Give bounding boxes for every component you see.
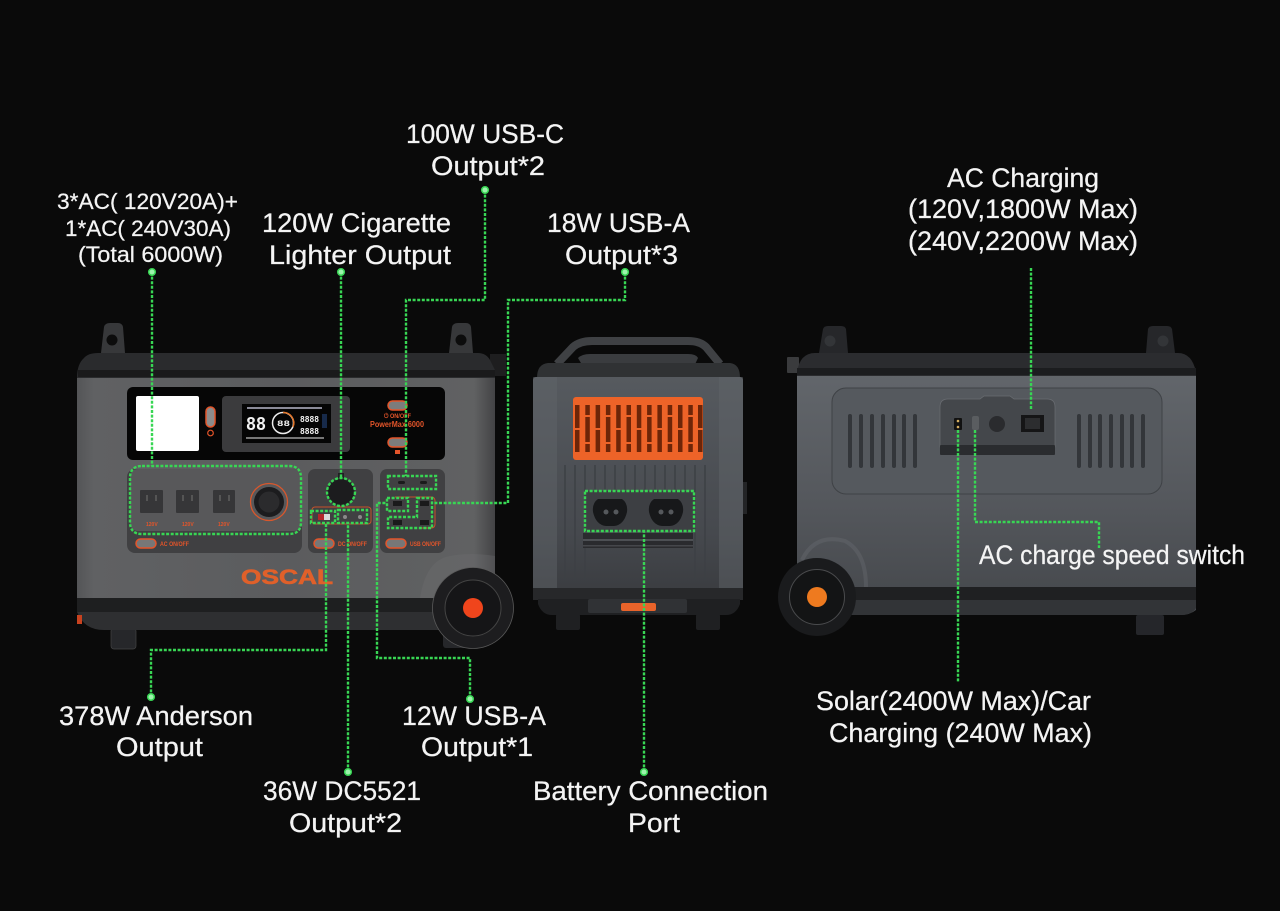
outlets: 120V	[218, 522, 230, 528]
rear wheel	[778, 558, 856, 636]
display module	[222, 396, 350, 452]
label: USB-A x1: Output*1	[421, 732, 533, 762]
label: USB-A x1	[402, 701, 546, 762]
label: solar	[816, 686, 1092, 748]
label: AC charging	[908, 163, 1138, 256]
end dots	[148, 187, 647, 775]
connector cover fins	[583, 533, 693, 548]
callout lines	[130, 187, 1099, 775]
main body	[77, 353, 495, 630]
carry ears	[101, 323, 506, 376]
line: AC outputs	[130, 272, 301, 534]
AC outlets module	[127, 469, 302, 553]
front unit	[77, 323, 514, 649]
model text and buttons: PowerMax 6000	[370, 420, 424, 429]
feet	[556, 614, 720, 630]
label: USB-A x1: 12W USB-A	[402, 701, 546, 731]
rear port bay	[940, 396, 1055, 455]
label: DC5521	[263, 776, 421, 838]
LCD screen	[242, 404, 331, 443]
recessed panel	[832, 388, 1162, 494]
240V socket	[250, 484, 288, 520]
USB module	[380, 469, 445, 553]
label: cigarette lighter: Lighter Output	[269, 240, 452, 270]
label: cigarette lighter: 120W Cigarette	[262, 208, 451, 238]
label: speed switch: AC charge speed switch	[979, 540, 1245, 570]
LCD screen: 8888	[300, 426, 319, 437]
label: AC outputs	[57, 189, 238, 267]
label: USB-A x3: Output*3	[565, 240, 678, 270]
line: USB-A x1	[377, 498, 470, 699]
bottom latch	[588, 599, 687, 613]
label: battery: Battery Connection	[533, 776, 768, 806]
line: USB-C	[388, 190, 485, 489]
DC module: DC ON/OFF	[338, 542, 367, 548]
label: Anderson	[59, 701, 253, 762]
ears	[787, 326, 1175, 373]
LCD screen: 88	[277, 420, 290, 429]
label: DC5521: 36W DC5521	[263, 776, 421, 806]
label: AC outputs: (Total 6000W)	[78, 242, 223, 267]
left vents	[848, 414, 917, 468]
label: AC outputs: 1*AC( 240V30A)	[65, 216, 231, 241]
outlets	[140, 490, 235, 528]
label: AC charging: (240V,2200W Max)	[908, 226, 1138, 256]
DC module	[308, 469, 373, 553]
label: DC5521: Output*2	[289, 808, 402, 838]
foot	[1136, 615, 1164, 635]
side red tab	[77, 615, 82, 624]
battery connectors	[585, 491, 694, 531]
body	[797, 353, 1196, 615]
line: DC5521	[338, 510, 367, 772]
wheel	[432, 568, 514, 648]
label: solar: Solar(2400W Max)/Car	[816, 686, 1091, 716]
label: USB-A x3: 18W USB-A	[547, 208, 690, 238]
label: battery	[533, 776, 768, 838]
AC switch: AC ON/OFF	[160, 542, 189, 548]
label: AC charging: AC Charging	[947, 163, 1099, 193]
line: Anderson	[151, 511, 335, 697]
LCD screen: 8888	[300, 414, 319, 425]
AC switch	[136, 539, 189, 548]
line: speed switch	[975, 430, 1099, 548]
LCD screen: 88	[246, 414, 266, 436]
rear unit	[778, 326, 1196, 636]
model text and buttons	[370, 401, 424, 454]
line: solar	[957, 430, 959, 682]
body	[533, 363, 747, 615]
label: cigarette lighter	[262, 208, 452, 270]
label: USB-C: Output*2	[431, 151, 545, 181]
label: Anderson: Output	[116, 732, 204, 762]
light button	[206, 407, 215, 436]
white label	[136, 396, 199, 451]
label: AC outputs: 3*AC( 120V20A)+	[57, 189, 238, 214]
feet	[111, 628, 467, 649]
label: USB-C: 100W USB-C	[406, 119, 564, 149]
outlets: 120V	[146, 522, 158, 528]
line: cigarette lighter	[327, 272, 355, 506]
line: battery	[585, 491, 694, 772]
orange vent	[573, 397, 703, 460]
handle	[557, 341, 720, 375]
line: AC charging	[1030, 268, 1032, 410]
label: solar: Charging (240W Max)	[829, 718, 1092, 748]
label: AC charging: (120V,1800W Max)	[908, 194, 1138, 224]
line: USB-A x3	[388, 272, 625, 528]
label: battery: Port	[628, 808, 681, 838]
outlets: 120V	[182, 522, 194, 528]
label: USB-A x3	[547, 208, 690, 270]
USB module: USB ON/OFF	[410, 542, 441, 548]
model text and buttons: ⏻ ON/OFF	[384, 412, 411, 420]
right vents	[1077, 414, 1145, 468]
label: Anderson: 378W Anderson	[59, 701, 253, 731]
brand logo: OSCAL	[241, 566, 333, 589]
center unit	[533, 341, 747, 630]
top control panel	[127, 387, 445, 460]
label: USB-C	[406, 119, 564, 181]
